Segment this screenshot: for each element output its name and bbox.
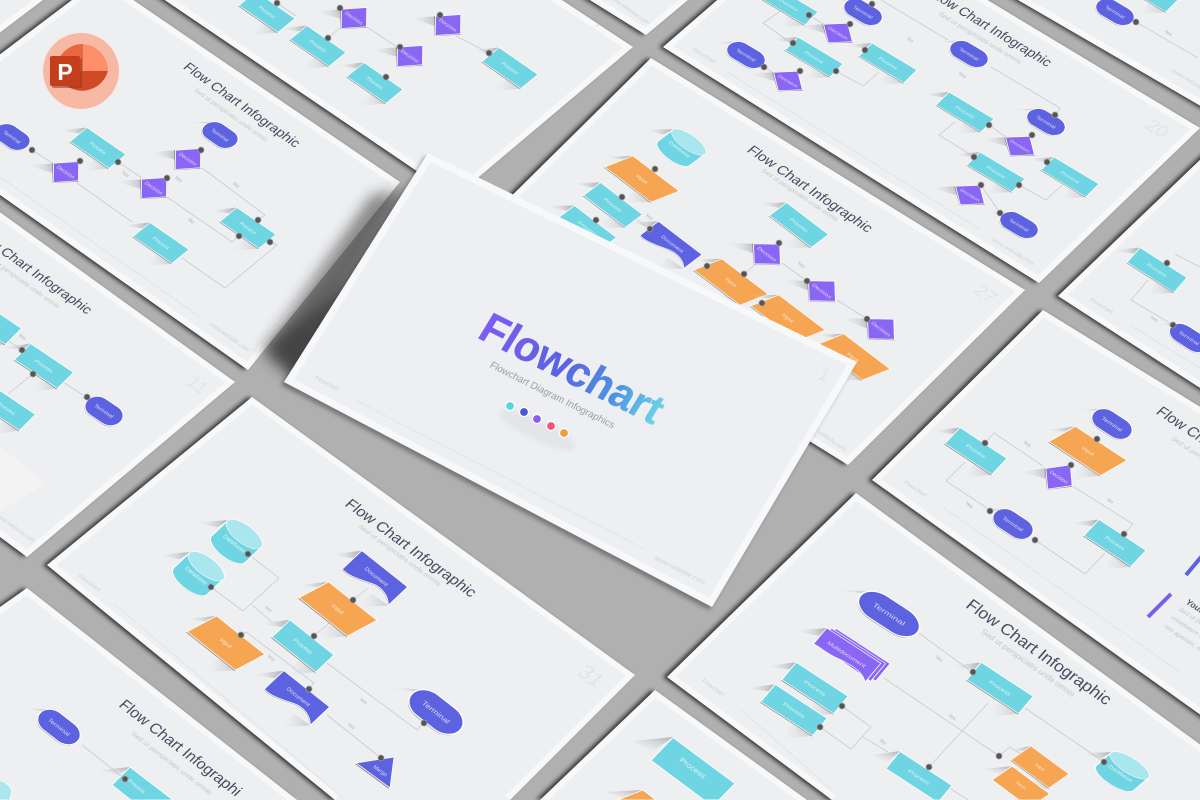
document: Document [659, 235, 685, 254]
terminal [1072, 395, 1137, 444]
footer brand: Flowchart [690, 47, 717, 65]
panel: top-left corner slide [0, 0, 43, 32]
terminal: Terminal [1, 130, 22, 145]
slide subtitle: Sed ut perspiciatis unde omnis [129, 731, 214, 797]
decision [325, 8, 367, 29]
decision [125, 178, 167, 199]
process [68, 128, 126, 170]
slide number: 7 [589, 13, 613, 33]
blue bar [1186, 556, 1200, 575]
input [161, 603, 265, 691]
branch labels: No [231, 181, 241, 189]
slide number: 20 [1140, 116, 1173, 142]
input: Input [845, 352, 860, 363]
subtitle: Flowchart Diagram Infographics [487, 360, 617, 431]
pale image placeholder [0, 430, 45, 525]
terminal [825, 0, 887, 30]
terminal large: Terminal [420, 699, 452, 725]
process [914, 416, 1007, 489]
connector dots [817, 669, 1107, 770]
database: Database [1106, 764, 1133, 783]
process [344, 62, 404, 105]
terminal: Terminal [1001, 516, 1024, 533]
process: Process [1103, 536, 1126, 552]
terminal: Terminal [1034, 115, 1057, 130]
document [638, 221, 702, 270]
terminal [1077, 0, 1139, 30]
input: Input [218, 638, 233, 650]
branch labels: Yes [795, 261, 807, 270]
input [1025, 415, 1127, 495]
multidocument stack [790, 611, 890, 686]
footer brand: Flowchart [313, 376, 340, 393]
decision: Decision [343, 11, 364, 26]
decision: Decision [437, 18, 458, 33]
input: Input [330, 604, 345, 616]
process [240, 607, 334, 688]
process [935, 650, 1033, 729]
process cropped at frame: Process [126, 779, 146, 795]
powerpoint badge [43, 33, 119, 109]
footer url: www.website.com [652, 555, 706, 586]
connector dots [29, 147, 273, 245]
terminal: Terminal [92, 404, 114, 420]
branch labels [119, 170, 241, 225]
decision: Decision [143, 181, 164, 196]
terminal [66, 383, 128, 431]
slide title: Flow Chart Infographic [341, 496, 481, 601]
process: Process [964, 444, 987, 460]
process: Process [602, 198, 623, 214]
input [273, 569, 377, 657]
process [729, 672, 827, 751]
process [908, 82, 994, 144]
input [820, 334, 890, 381]
terminal [198, 122, 238, 149]
connector dots [593, 166, 870, 322]
decision: Decision [869, 321, 891, 338]
input [604, 156, 680, 203]
colour dots [506, 402, 568, 438]
branch labels: Yes [357, 697, 369, 706]
process: Process [237, 221, 258, 236]
terminal [0, 124, 30, 151]
branch labels: Yes [963, 501, 975, 510]
input: Input [723, 277, 738, 288]
connector dot [122, 776, 128, 782]
branch labels [262, 605, 369, 731]
panel: bottom-center slide [540, 690, 807, 800]
branch labels: No [905, 36, 915, 44]
process [0, 289, 22, 359]
footer url: www.website.com [989, 237, 1035, 267]
process: Process [877, 56, 899, 71]
decision: Decision [1008, 139, 1031, 154]
database: Database [183, 566, 209, 587]
process cropped at frame [872, 751, 952, 800]
process: Process [954, 105, 976, 120]
process [750, 650, 848, 729]
process: Process [803, 50, 825, 65]
database cropped at frame [0, 781, 12, 800]
branch labels: No [186, 217, 196, 225]
process [766, 202, 829, 248]
terminal: Terminal [1177, 330, 1200, 347]
process [480, 48, 538, 90]
decision [747, 53, 813, 101]
terminal [981, 199, 1043, 243]
document [233, 658, 330, 740]
process cropped at frame: Process [906, 769, 930, 786]
input cropped at frame [605, 790, 656, 800]
process: Process [307, 39, 328, 54]
branch labels: Yes [345, 722, 357, 731]
connector dot [1133, 19, 1139, 25]
process [0, 333, 74, 403]
terminal: Terminal [1103, 5, 1126, 20]
process: Process [87, 141, 108, 156]
slide title: Flow Chart Infographic [180, 60, 304, 150]
slide subtitle: Sed ut perspiciatis unde omnis [979, 627, 1077, 699]
process: Process [1146, 263, 1168, 279]
merge triangle [355, 757, 394, 789]
process: Process [33, 359, 54, 375]
process: Process [788, 218, 809, 234]
footer url: www.website.com [206, 321, 251, 353]
decision [929, 167, 995, 215]
branch labels: Yes [262, 605, 274, 614]
input [693, 258, 768, 306]
process: Process [987, 680, 1011, 697]
input cropped at frame [985, 766, 1050, 800]
panel: right slide with process flow [872, 310, 1200, 786]
document [311, 538, 408, 620]
decision [779, 260, 849, 313]
terminal large: Terminal [871, 601, 907, 627]
decision [1019, 447, 1084, 500]
footer url: www.website.com [803, 421, 848, 453]
terminal: Terminal [957, 47, 980, 62]
branch labels: Yes [265, 654, 277, 663]
decision [381, 46, 423, 67]
connector dots [1164, 260, 1176, 328]
database [188, 501, 268, 569]
slide subtitle: Sed ut perspiciatis unde omnis [937, 11, 1023, 66]
database: Database [667, 140, 691, 159]
slide title: Flow Chart Infographic [744, 142, 877, 235]
process [732, 0, 818, 37]
decision [979, 118, 1045, 166]
panel: slide 11 [0, 140, 235, 557]
process: Process [576, 221, 597, 237]
terminal [708, 29, 770, 73]
database: Database [221, 534, 247, 555]
panel: slide 7 [164, 0, 633, 178]
panel: slide 20 [663, 0, 1200, 283]
text block [1162, 597, 1200, 660]
connector dots [274, 0, 492, 80]
panel: top-right slide [980, 0, 1200, 152]
decision [838, 298, 908, 351]
terminal: Terminal [209, 128, 230, 143]
slide subtitle: Sed ut perspiciatis unde omnis [192, 87, 270, 144]
process: Process [499, 61, 520, 76]
panel: bottom-left slide [0, 588, 297, 800]
branch label: Yes [16, 333, 28, 342]
terminal [1150, 310, 1200, 357]
decision: Decision [755, 246, 777, 263]
branch label: Yes [1148, 315, 1160, 324]
branch labels [963, 440, 1115, 510]
decision [159, 148, 201, 170]
connector dots [19, 347, 90, 400]
process [554, 205, 617, 242]
footer brand: Flowchart [700, 679, 726, 698]
connector dots [208, 551, 427, 761]
process [0, 375, 36, 445]
terminal [973, 495, 1038, 544]
input: Input [1080, 446, 1095, 458]
soft shadow under dots [495, 403, 579, 457]
slide title cropped at frame: Flow Chart Infographi [115, 697, 245, 800]
slide subtitle: Sed ut perspiciatis unde omnis [356, 524, 443, 588]
branch labels: Yes [643, 213, 655, 222]
database [1071, 735, 1155, 796]
terminal [1008, 96, 1070, 140]
process [831, 33, 917, 95]
process [238, 0, 296, 34]
database [653, 128, 706, 167]
panel: slide 31 [47, 397, 635, 800]
multidocument stack: Multidocument [826, 641, 866, 669]
decision [419, 14, 461, 36]
panel: bottom-right slide [667, 493, 1200, 800]
process: Process [985, 165, 1007, 180]
terminal: Terminal [1007, 218, 1030, 233]
decision: Decision [776, 74, 799, 89]
process: Process [256, 5, 277, 20]
center slide cast shadow [262, 156, 854, 610]
branch labels: Yes [1021, 440, 1033, 449]
terminal: Terminal [734, 48, 757, 63]
connector dots [761, 1, 1058, 216]
decision: Decision [399, 49, 420, 64]
document: Document [285, 687, 311, 708]
decision: Decision [177, 152, 198, 167]
slide number: 31 [572, 660, 610, 692]
process [130, 222, 190, 265]
input cropped at frame: Input [1015, 780, 1027, 791]
slide number: 11 [181, 373, 213, 398]
branch labels: Yes [119, 170, 131, 179]
connector dots [982, 436, 1127, 543]
process: Process [291, 638, 313, 656]
branch labels: Yes [946, 713, 957, 722]
process [757, 27, 843, 89]
terminal large [828, 570, 926, 644]
panel: slide top-left with PowerPoint badge [0, 0, 400, 370]
branch labels: Yes [933, 655, 944, 664]
database [150, 533, 230, 601]
branch labels: No [1105, 497, 1115, 505]
process: Process [150, 236, 171, 251]
input: Input [1034, 762, 1046, 773]
branch labels: Yes [956, 71, 968, 80]
purple bar [1148, 594, 1171, 617]
branch labels [878, 655, 957, 746]
process [580, 182, 643, 228]
slide title: Flow Chart Infographic [962, 596, 1115, 709]
process cropped at frame [100, 767, 173, 800]
branch labels: Yes [172, 175, 184, 184]
decision [736, 244, 781, 266]
branch labels [643, 213, 807, 270]
process: Process [1059, 170, 1081, 185]
panel: top corner slide [590, 0, 688, 35]
decision [797, 5, 863, 53]
process large cropped at frame: Process [678, 756, 708, 780]
slide number: 27 [969, 281, 1002, 307]
process [280, 26, 346, 68]
footer brand: Flowchart [76, 574, 102, 593]
branch label: Yes [1162, 29, 1174, 38]
footer brand: Flowchart [1087, 297, 1114, 315]
input: Input [780, 313, 795, 324]
process large cropped at frame [633, 737, 735, 800]
merge triangle: Merge [371, 765, 388, 778]
process: Process [781, 702, 805, 719]
process: Process [802, 680, 826, 697]
panel: right slide [1058, 64, 1200, 485]
powerpoint badge: P [57, 59, 73, 85]
terminal: Terminal [46, 717, 71, 738]
terminal [17, 693, 86, 751]
input: Input [634, 174, 649, 185]
decision: Decision [826, 26, 849, 41]
terminal: Terminal [1100, 416, 1123, 433]
terminal [931, 28, 993, 72]
decision: Decision [1048, 470, 1069, 485]
footer brand: Flowchart [902, 480, 928, 499]
process [1093, 0, 1179, 24]
decision: Decision [810, 283, 832, 300]
terminal: Terminal [851, 5, 874, 20]
input [993, 737, 1069, 800]
branch labels [905, 36, 968, 80]
main title: Flowchart [471, 305, 673, 434]
process: Process [364, 76, 385, 91]
slide number: 1 [814, 364, 834, 387]
input [750, 294, 826, 338]
process [1098, 237, 1187, 306]
terminal large [382, 668, 471, 742]
decision [37, 162, 79, 183]
branch labels: No [878, 738, 887, 746]
decision: Decision [958, 188, 981, 203]
panel: center cover slide [284, 153, 857, 607]
decision: Decision [55, 165, 76, 180]
process [218, 208, 276, 250]
slide subtitle: Sed ut perspiciatis unde omnis [760, 168, 840, 223]
panel: slide 27 [474, 58, 1025, 465]
process [939, 142, 1025, 204]
process [1053, 508, 1146, 581]
process [1013, 147, 1099, 209]
document: Document [363, 567, 389, 588]
